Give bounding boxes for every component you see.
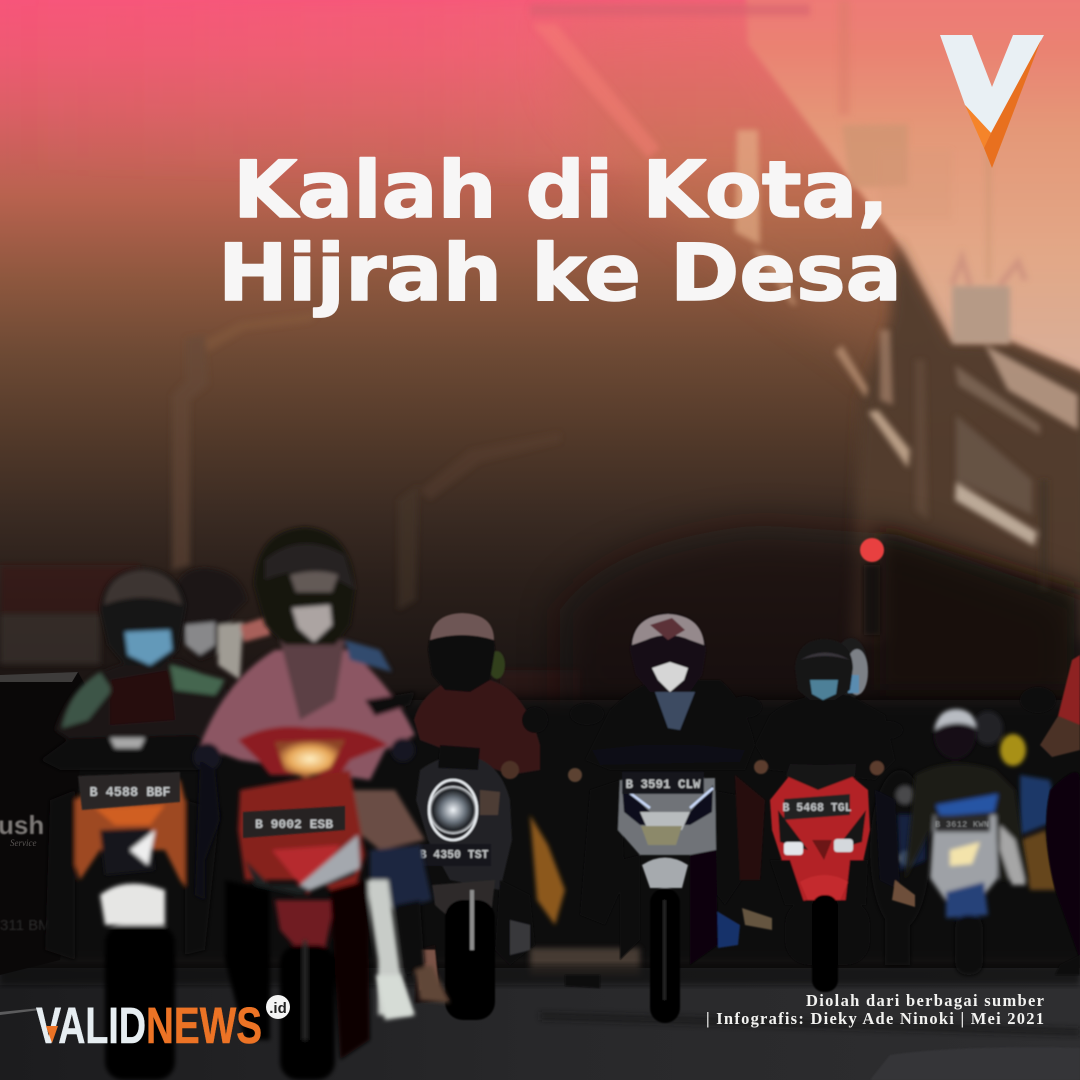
lit building face and sky	[745, 0, 1080, 380]
legs and gloves	[193, 743, 221, 771]
helmet	[100, 568, 186, 668]
source credit: | Infografis: Dieky Ade Ninoki | Mei 2021	[706, 1009, 1044, 1028]
mid face below the diagonal	[560, 10, 950, 420]
scooter right blurred orange object	[530, 815, 565, 925]
legs	[580, 780, 625, 925]
rider: far right, blue and white scooter	[905, 709, 1028, 975]
mirror	[522, 707, 548, 733]
licence plate B 4588 BBF	[78, 772, 180, 810]
licence plate B 9002 ESB: B 9002 ESB	[255, 817, 333, 832]
arched lower flyover shadow	[560, 525, 1080, 720]
rider: pink jacket, red scooter (foreground, blurred)	[193, 527, 450, 1080]
mirror arms	[592, 745, 745, 765]
licence plate B 3591 CLW: B 3591 CLW	[625, 778, 701, 792]
rider: black jacket on red scooter	[754, 638, 915, 992]
jacket	[755, 694, 895, 780]
rider: white mask, silver scooter	[565, 613, 772, 1023]
rider: rear passenger, left	[175, 568, 272, 680]
left pillar and arch	[172, 335, 208, 570]
rider: blue mask, orange scooter	[40, 568, 228, 1080]
logo: Validnews.id: VALID	[36, 997, 146, 1054]
blue mask	[125, 630, 172, 665]
passenger behind	[834, 638, 868, 698]
white sneaker	[376, 975, 415, 1020]
red scooter	[238, 726, 388, 775]
rider: far right edge, red shirt	[1020, 655, 1080, 975]
flower box	[952, 286, 1010, 344]
jacket	[55, 660, 228, 750]
scooter	[416, 755, 512, 890]
licence plate B 3591 CLW	[622, 772, 704, 794]
parked dark car with lettering	[0, 672, 88, 975]
distant riders, right	[870, 711, 1058, 965]
licence plate B 5468 TGL: B 5468 TGL	[782, 802, 852, 815]
mask	[652, 662, 688, 692]
plate: blurred far scooter	[935, 815, 990, 832]
dark traffic mass behind riders	[0, 700, 1080, 965]
diagonal stripe	[532, 24, 660, 158]
helmet	[630, 613, 706, 692]
pole	[986, 150, 991, 280]
mask	[292, 605, 332, 642]
licence plate B 5468 TGL	[782, 794, 852, 820]
licence plate B 4350 TST	[417, 844, 491, 866]
red scooter body	[770, 770, 870, 905]
left wall bands	[0, 565, 140, 613]
parked dark car with lettering: 311 BM	[0, 917, 51, 934]
source credit	[706, 991, 1044, 1028]
top beam	[530, 4, 810, 16]
traffic light	[860, 538, 884, 635]
helmet	[489, 651, 505, 679]
wall box	[842, 124, 908, 188]
logo: V mark	[940, 35, 1044, 168]
title	[218, 146, 902, 319]
scooter	[40, 735, 218, 770]
vertical strip	[838, 0, 850, 115]
logo: Validnews.id: .id	[269, 1000, 287, 1017]
rider: maroon hoodie, black scooter	[414, 613, 565, 1020]
logo: Validnews.id	[36, 995, 290, 1054]
logo: Validnews.id: NEWS	[146, 997, 262, 1054]
hoodie	[414, 680, 540, 775]
title: Hijrah ke Desa	[218, 229, 902, 319]
licence plate B 4350 TST: B 4350 TST	[419, 849, 489, 862]
jacket	[200, 650, 415, 780]
jacket	[585, 680, 755, 770]
dark balcony and pillars mass	[850, 240, 1080, 640]
flyover building structure	[0, 0, 1080, 720]
rider: far right, blue and white scooter: B 3612 KWN	[935, 820, 989, 830]
road	[0, 948, 1080, 1080]
helmet	[795, 639, 853, 700]
source credit: Diolah dari berbagai sumber	[806, 991, 1044, 1010]
licence plate B 9002 ESB	[243, 806, 345, 838]
title: Kalah di Kota,	[233, 146, 889, 236]
parked dark car with lettering: Service	[10, 838, 36, 848]
licence plate B 4588 BBF: B 4588 BBF	[89, 786, 171, 801]
streak and pillars	[835, 345, 868, 398]
helmet	[254, 527, 355, 645]
silver scooter	[618, 778, 716, 855]
balcony rail	[985, 345, 1078, 430]
